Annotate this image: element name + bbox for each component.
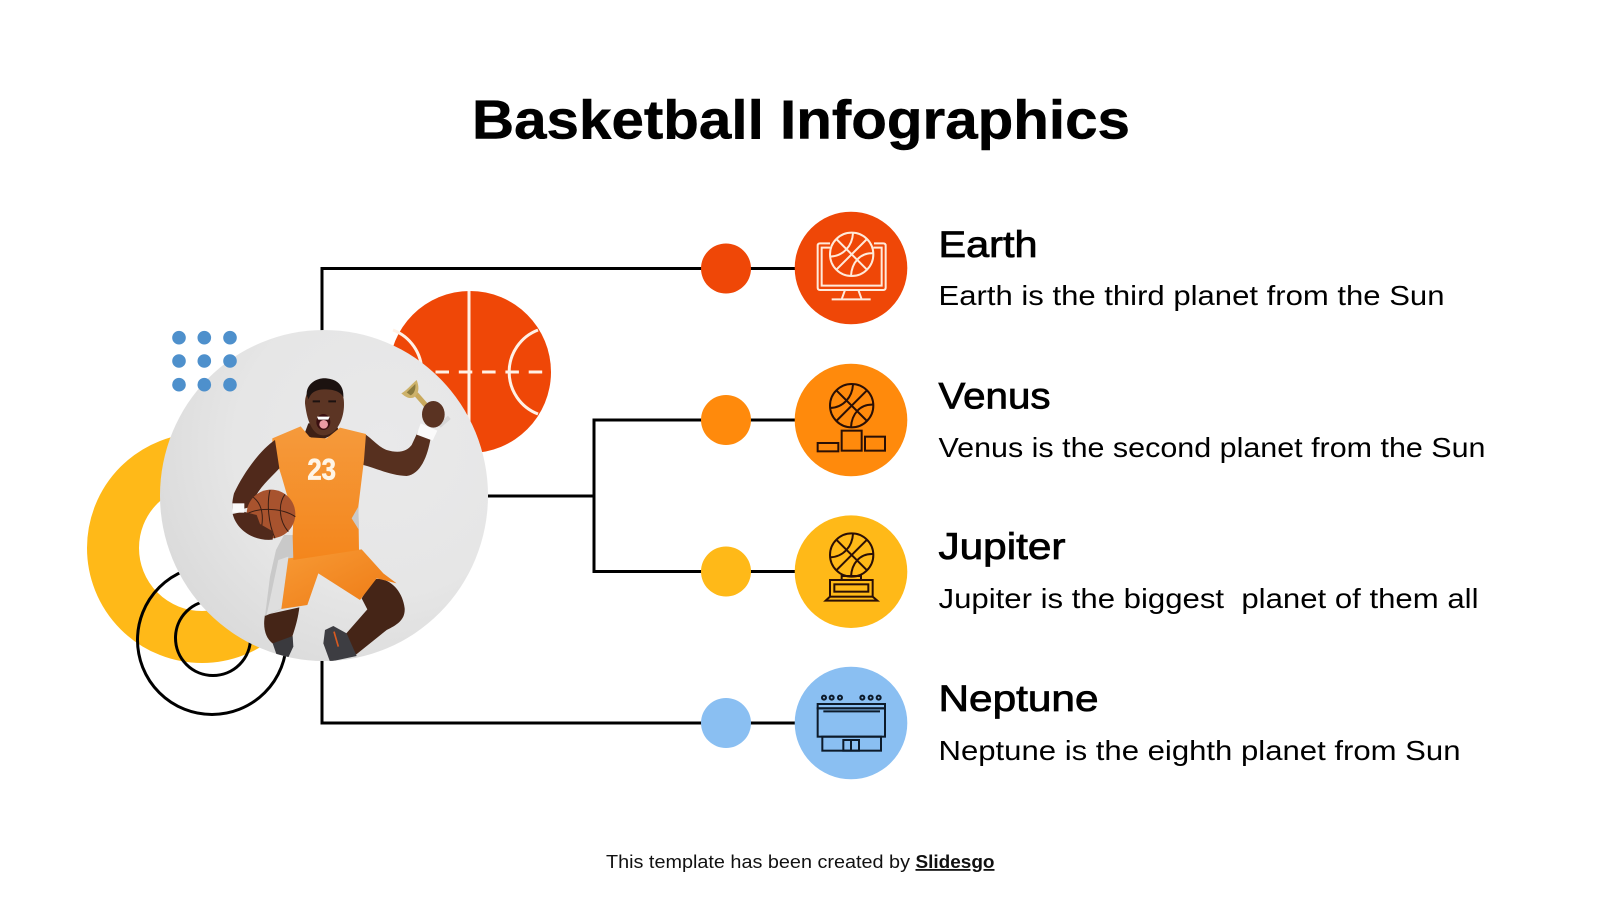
player: grey side panel (265, 535, 296, 616)
text block: Earth (938, 224, 1444, 311)
footer credit: Slidesgo (916, 852, 995, 872)
decoration: orange basketball court (389, 291, 551, 453)
player: jersey number: 23 (307, 453, 336, 486)
player: eyes (312, 400, 336, 402)
text block: Venus: Venus (938, 376, 1050, 416)
player: left arm (232, 440, 279, 512)
player: far shoe (273, 636, 293, 657)
player: jersey side seam (352, 507, 359, 530)
player: shorts (281, 549, 397, 609)
decoration: yellow ring (113, 459, 291, 637)
text block: Neptune: Neptune is the eighth planet from Sun (938, 735, 1460, 766)
node dot: Neptune (701, 698, 751, 748)
player: near leg (344, 579, 405, 655)
player: left hand (233, 512, 273, 540)
player: hand with trophy (422, 401, 445, 428)
text block: Earth: Earth is the third planet from the Sun (938, 280, 1444, 311)
title: Basketball Infographics (472, 88, 1130, 150)
icon: stadium (795, 667, 907, 779)
icon: monitor with basketball (795, 212, 907, 324)
photo circle: basketball player (160, 330, 488, 662)
footer credit: This template has been created by (606, 852, 910, 872)
connector lines (322, 268, 795, 723)
text block: Neptune (938, 678, 1460, 766)
node dot: Venus (701, 395, 751, 445)
player: mouth (316, 414, 330, 430)
text block: Jupiter (938, 526, 1478, 614)
node dot: Jupiter (701, 546, 751, 596)
icon: basketball on podium (795, 364, 907, 476)
text block: Earth: Earth (938, 224, 1038, 265)
player: jersey (272, 426, 366, 560)
player: face (305, 389, 344, 436)
decoration: black outline circles (138, 566, 286, 714)
player: right arm (363, 431, 431, 476)
player: near shoe (323, 626, 357, 662)
text block: Jupiter: Jupiter (938, 526, 1066, 567)
decoration: blue dots (172, 331, 237, 392)
player: hair (307, 378, 343, 399)
text block: Jupiter: Jupiter is the biggest planet of them all (938, 583, 1478, 614)
player: basketball (247, 490, 295, 538)
player: far leg (264, 607, 299, 644)
icon: basketball trophy (795, 515, 907, 628)
text block: Venus: Venus is the second planet from the Sun (938, 432, 1486, 463)
text block: Neptune: Neptune (938, 678, 1098, 719)
node dot: Earth (701, 244, 751, 294)
player: left wristband (232, 503, 244, 513)
player: neck (305, 423, 338, 438)
text block: Venus (938, 376, 1486, 463)
player: trophy (401, 380, 449, 426)
player: right wristband (417, 423, 437, 441)
